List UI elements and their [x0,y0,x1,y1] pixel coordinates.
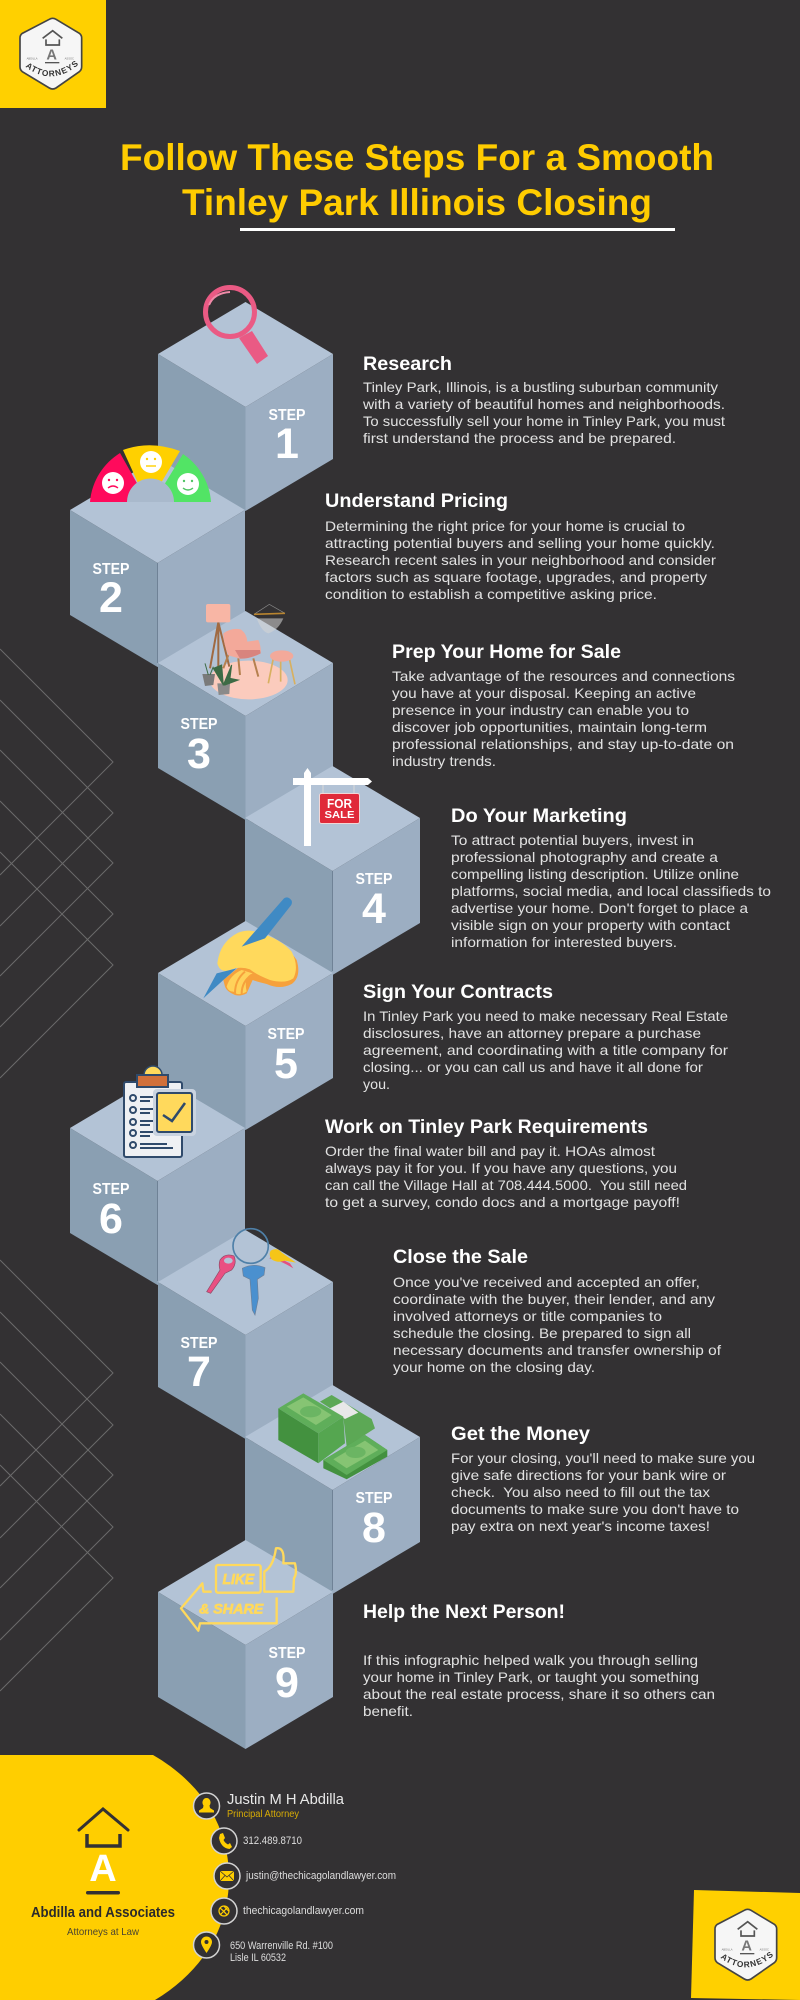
text block: close the sale: involved attorneys or title companies to [393,1308,662,1324]
text block: tinley park requirements: always pay it for you. If you have any questions, you [325,1160,677,1176]
footer panel: firm logo [0,1755,229,2000]
step 3 label: 3 [187,730,211,778]
icon: for sale sign: SALE [324,809,354,821]
icon: like and share [181,1548,296,1631]
text block: close the sale [393,1247,721,1375]
text block: prep your home: industry trends. [392,753,496,769]
icon: home furniture [202,604,295,699]
text block: sign your contracts: In Tinley Park you need to make necessary Real Estate [363,1008,728,1024]
icon: attorneys hexagon badge: ABDILLA [722,1947,733,1951]
text block: sign your contracts: agreement, and coordinating with a title company for [363,1042,728,1058]
text block: close the sale: schedule the closing. Be prepared to sign all [393,1325,691,1341]
icon: clipboard checklist [124,1066,196,1157]
text block: tinley park requirements: Order the final water bill and pay it. HOAs almost [325,1143,655,1159]
step 4 cube [245,766,420,975]
text block: help the next person: benefit. [363,1703,413,1719]
text block: research [362,354,725,446]
text block: do your marketing: professional photography and create a [451,849,718,865]
text block: research: Research [363,354,452,375]
icon: attorneys hexagon badge: ASSOC [65,56,74,60]
logo panel: top left badge [0,0,106,108]
title: Follow These Steps For a Smooth [120,137,714,178]
step 5 label [268,1026,305,1088]
text block: close the sale: your home on the closing day. [393,1359,595,1375]
text block: sign your contracts: you. [363,1076,390,1092]
text block: help the next person [363,1602,715,1719]
text block: research: To successfully sell your home in Tinley Park, you must [363,413,725,429]
text block: sign your contracts: disclosures, have an attorney prepare a purchase [363,1025,701,1041]
text block: understand pricing: Determining the right price for your home is crucial to [325,518,685,534]
text block: research: first understand the process and be prepared. [363,430,676,446]
text block: prep your home: presence in your industry can enable you to [392,702,689,718]
step 8 label [356,1490,393,1552]
icon: phone [219,1833,232,1849]
title [120,137,714,223]
icon: map pin [201,1936,212,1953]
icon: like and share: & SHARE [199,1600,264,1616]
text block: do your marketing: platforms, social media, and local classifieds to [451,883,771,899]
icon: for sale sign [293,768,372,846]
step 2 label: 2 [99,574,123,622]
text block: help the next person: Help the Next Person! [363,1602,565,1623]
icon: house logo [79,1809,128,1894]
icon: like and share: LIKE [222,1572,255,1588]
step 8 label: STEP [356,1490,393,1507]
title: Tinley Park Illinois Closing [182,182,652,223]
text block: get the money: pay extra on next year's income taxes! [451,1518,710,1534]
text block: prep your home: discover job opportunities, maintain long-term [392,719,707,735]
text block: tinley park requirements: can call the Village Hall at 708.444.5000. You still need [325,1177,687,1193]
text block: sign your contracts [363,982,728,1092]
contact: address [194,1932,333,1964]
contact: name [194,1791,345,1820]
icon: stacks of money [278,1393,387,1479]
step 1 label [268,407,306,468]
step 2 label [92,561,130,622]
contact: phone: 312.489.8710 [243,1835,302,1847]
step 1 label: 1 [275,420,299,468]
text block: tinley park requirements: Work on Tinley Park Requirements [325,1117,648,1138]
step 5 label: STEP [268,1026,305,1043]
text block: get the money [451,1424,755,1534]
text block: prep your home [392,642,735,769]
step 3 cube [158,604,333,820]
text block: close the sale: Close the Sale [393,1247,528,1268]
text block: close the sale: Once you've received and accepted an offer, [393,1274,700,1290]
step 9 label: 9 [275,1659,299,1707]
text block: do your marketing: advertise your home. Don't forget to place a [451,900,748,916]
step 9 label: STEP [268,1645,306,1662]
contact: phone [211,1828,302,1854]
icon: attorneys hexagon badge [714,1908,778,1981]
text block: understand pricing: Research recent sales in your neighborhood and consider [325,552,716,568]
step 2 cube [70,445,245,667]
firm tagline: Attorneys at Law [67,1926,139,1938]
icon: house logo: A [89,1848,117,1890]
step 1 cube [158,288,333,511]
text block: do your marketing: compelling listing description. Utilize online [451,866,739,882]
icon: envelope [220,1871,234,1881]
icon: person [199,1798,214,1812]
icon: for sale sign: FOR [327,797,352,811]
text block: tinley park requirements: to get a survey, condo docs and a mortgage payoff! [325,1194,680,1210]
text block: do your marketing: To attract potential buyers, invest in [451,832,694,848]
text block: prep your home: Prep Your Home for Sale [392,642,621,663]
icon: attorneys hexagon badge: ATTORNEYS [26,61,78,76]
contact: website [211,1898,364,1924]
text block: understand pricing [325,491,716,602]
icon: key ring [207,1229,296,1315]
step 7 label: 7 [187,1348,211,1396]
text block: prep your home: professional relationships, and stay up-to-date on [392,736,734,752]
icon: magnifying glass [206,288,268,364]
contact: name: Justin M H Abdilla [227,1791,345,1808]
icon: attorneys hexagon badge: ATTORNEYS [720,1952,773,1968]
contact: website: thechicagolandlawyer.com [243,1905,364,1917]
contact: address: Lisle IL 60532 [230,1952,286,1964]
text block: understand pricing: condition to establish a competitive asking price. [325,586,657,602]
step 6 cube [70,1066,245,1285]
text block: do your marketing: information for interested buyers. [451,934,677,950]
text block: do your marketing [451,806,771,950]
text block: get the money: check. You also need to fill out the tax [451,1484,710,1500]
text block: get the money: For your closing, you'll need to make sure you [451,1450,755,1466]
icon: attorneys hexagon badge: A [46,47,57,63]
step 5 label: 5 [274,1040,298,1088]
text block: research: Tinley Park, Illinois, is a bustling suburban community [363,379,718,395]
text block: close the sale: coordinate with the buyer, their lender, and any [393,1291,715,1307]
step 8 label: 8 [362,1504,386,1552]
step 4 label [356,871,393,933]
firm name: Abdilla and Associates [31,1904,175,1921]
text block: help the next person: about the real estate process, share it so others can [363,1686,715,1702]
icon: globe [219,1906,229,1916]
step 5 cube [158,897,333,1130]
step 3 label [180,716,218,778]
text block: understand pricing: Understand Pricing [325,491,508,512]
text block: understand pricing: attracting potential buyers and selling your home quickly. [325,535,715,551]
contact: address: 650 Warrenville Rd. #100 [230,1940,333,1952]
text block: prep your home: you have at your disposal. Keeping an active [392,685,696,701]
text block: understand pricing: factors such as square footage, upgrades, and property [325,569,707,585]
icon: attorneys hexagon badge: ASSOC [760,1947,769,1951]
text block: help the next person: If this infographic helped walk you through selling [363,1652,698,1668]
contact: name: Principal Attorney [227,1809,299,1820]
text block: tinley park requirements [325,1117,687,1210]
text block: close the sale: necessary documents and transfer ownership of [393,1342,721,1358]
text block: get the money: give safe directions for your bank wire or [451,1467,726,1483]
logo panel: bottom right badge [691,1890,800,2000]
icon: hand signing with pen [203,897,298,998]
icon: attorneys hexagon badge: ABDILLA [27,56,38,60]
step 6 label: STEP [92,1181,130,1198]
text block: sign your contracts: closing... or you can call us and have it all done for [363,1059,703,1075]
step 6 label: 6 [99,1195,123,1243]
text block: sign your contracts: Sign Your Contracts [363,982,553,1003]
text block: do your marketing: Do Your Marketing [451,806,627,827]
step 4 label: STEP [356,871,393,888]
text block: help the next person: your home in Tinley Park, or taught you something [363,1669,699,1685]
text block: research: with a variety of beautiful homes and neighborhoods. [362,396,725,412]
text block: get the money: Get the Money [451,1424,590,1445]
text block: get the money: documents to make sure you don't have to [451,1501,739,1517]
text block: do your marketing: visible sign on your property with contact [451,917,730,933]
text block: prep your home: Take advantage of the resources and connections [392,668,735,684]
step 6 label [92,1181,130,1243]
title underline [240,228,675,231]
icon: attorneys hexagon badge [19,18,82,90]
step 2 label: STEP [92,561,130,578]
step 4 label: 4 [362,885,386,933]
icon: satisfaction gauge [90,445,211,502]
step 7 label [180,1335,218,1396]
contact: email [214,1863,396,1889]
step 1 label: STEP [268,407,306,424]
icon: attorneys hexagon badge: A [741,1938,752,1954]
step 8 cube [245,1385,420,1594]
step 3 label: STEP [180,716,218,733]
contact: email: justin@thechicagolandlawyer.com [245,1870,396,1882]
step 7 label: STEP [180,1335,218,1352]
step 9 cube [158,1540,333,1749]
step 9 label [268,1645,306,1707]
step 7 cube [158,1229,333,1439]
